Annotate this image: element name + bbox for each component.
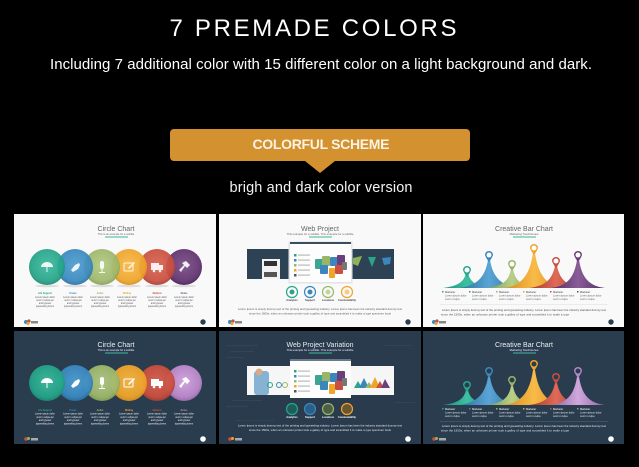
- circle captions: typesetting lorem: [36, 422, 54, 426]
- peak legend: Lorem ipsum dolor: [526, 410, 548, 414]
- panel: light creative bar chart slide: Marketing Touchstones: [510, 232, 539, 236]
- panel: light circle chart slide: Circle Chart: [98, 226, 135, 233]
- peak legend: [442, 407, 602, 418]
- peak legend: Marketer: [580, 290, 590, 294]
- circle captions: and typeset: [121, 302, 134, 305]
- body text: since the 1500s, when an unknown printer took a galley of type and scrambled it to make a type: [441, 312, 570, 316]
- circle captions: Lorem ipsum dolor: [35, 296, 55, 299]
- footer logo and page dot: [24, 436, 206, 442]
- circle captions: and typeset: [151, 419, 164, 422]
- circle captions: [35, 292, 194, 308]
- circle captions: Power: [69, 409, 77, 412]
- circle captions: typesetting lorem: [64, 305, 82, 308]
- peak chart: [443, 253, 605, 288]
- circle captions: Lorem ipsum dolor: [174, 412, 194, 416]
- circle captions: Audio: [97, 292, 104, 295]
- circle captions: Lorem ipsum dolor: [147, 296, 167, 299]
- feature labels: Locations: [322, 415, 335, 419]
- peak legend: sunt in culpa: [445, 414, 460, 418]
- peak legend: sunt in culpa: [472, 414, 487, 418]
- circle captions: typesetting lorem: [120, 422, 138, 426]
- circle captions: and typeset: [94, 419, 107, 422]
- circle captions: Lorem ipsum dolor: [90, 412, 110, 416]
- circle captions: and typeset: [67, 302, 80, 305]
- circle captions: Notes: [181, 409, 188, 412]
- panel: dark circle chart slide: Circle Chart: [98, 342, 135, 349]
- title: 7 PREMADE COLORS: [170, 15, 456, 42]
- panel: light circle chart slide: This is an example for a subtitle: [98, 232, 135, 236]
- banner caption: brigh and dark color version: [230, 180, 412, 196]
- peak legend: Lorem ipsum dolor: [445, 410, 467, 414]
- body text: [238, 424, 402, 432]
- panel: light circle chart slide: [14, 214, 216, 327]
- peak legend: Marketer: [526, 407, 536, 411]
- circle captions: Lorem ipsum dolor: [90, 296, 110, 299]
- feature labels: Commutability: [338, 415, 357, 419]
- footer logo and page dot: [24, 319, 206, 325]
- circle captions: Lorem ipsum dolor: [119, 412, 139, 416]
- circle captions: typesetting lorem: [175, 422, 193, 426]
- peak legend: Marketer: [499, 290, 509, 294]
- panel: light creative bar chart slide: [423, 214, 624, 327]
- circle captions: Lorem ipsum dolor: [147, 412, 167, 416]
- circle chart: six overlapping circles: [29, 249, 202, 287]
- circle captions: typesetting lorem: [91, 422, 109, 426]
- footer logo and page dot: [432, 436, 614, 442]
- body text: Lorem Ipsum is simply dummy text of the printing and typesetting industry. Lorem Ipsum has been the industry standard dummy text: [442, 308, 606, 312]
- icons: umbrella, plug, mic, note, truck, gavel: [41, 377, 190, 389]
- circle captions: sunt in culpa qui: [120, 416, 138, 419]
- circle captions: Lorem ipsum dolor: [117, 296, 137, 299]
- peak legend: Lorem ipsum dolor: [499, 410, 521, 414]
- feature labels: [286, 415, 357, 419]
- circle captions: Lorem ipsum dolor: [63, 412, 83, 416]
- faint code texture: [226, 345, 415, 421]
- peak legend: Marketer: [499, 407, 509, 411]
- body text: [238, 307, 402, 316]
- peak legend: sunt in culpa: [445, 297, 460, 301]
- panel: dark creative bar chart slide: Creative Bar Chart: [495, 342, 553, 349]
- banner: colorful scheme: COLORFUL SCHEME: [252, 136, 390, 152]
- circle captions: [35, 409, 194, 426]
- circle captions: sunt in culpa qui: [175, 416, 193, 419]
- peak legend: sunt in culpa: [499, 297, 514, 301]
- circle captions: sunt in culpa qui: [148, 299, 166, 302]
- feature labels: Analytics: [286, 415, 298, 419]
- circle captions: Lorem ipsum dolor: [63, 296, 83, 299]
- circle captions: and typeset: [39, 419, 52, 422]
- peak legend: Lorem ipsum dolor: [526, 294, 548, 298]
- peak legend: sunt in culpa: [526, 297, 541, 301]
- peak legend: sunt in culpa: [526, 414, 541, 418]
- panel: light creative bar chart slide: Creative Bar Chart: [495, 226, 553, 233]
- circle captions: sunt in culpa qui: [118, 299, 136, 302]
- panel: dark web project variation slide: [219, 331, 421, 444]
- circle captions: and typeset: [178, 419, 191, 422]
- banner: colorful scheme: [170, 129, 470, 173]
- panel: dark creative bar chart slide: Marketing Touchstones: [510, 348, 539, 352]
- circle captions: Audio: [97, 409, 104, 412]
- peak legend: Lorem ipsum dolor: [472, 294, 494, 298]
- peak legend: Lorem ipsum dolor: [580, 294, 602, 298]
- peak legend: Marketer: [472, 290, 482, 294]
- circle captions: Lorem ipsum dolor: [35, 412, 55, 416]
- peak legend: Marketer: [580, 407, 590, 411]
- circle captions: and typeset: [94, 302, 107, 305]
- body text: Lorem Ipsum is simply dummy text of the printing and typesetting industry. Lorem Ipsum has been the industry standard dummy text: [238, 307, 402, 311]
- circle captions: Medical: [153, 292, 162, 295]
- subtitle: Including 7 additional color with 15 different color on a light background and dark.: [50, 56, 592, 73]
- peak legend: Marketer: [553, 407, 563, 411]
- peak legend: Lorem ipsum dolor: [499, 294, 521, 298]
- peak legend: sunt in culpa: [472, 297, 487, 301]
- icons: umbrella, plug, mic, note, truck, gavel: [41, 261, 190, 273]
- circle captions: Lorem ipsum dolor: [174, 296, 194, 299]
- peak legend: Lorem ipsum dolor: [580, 410, 602, 414]
- panel: dark circle chart slide: This is an example for a subtitle: [98, 348, 135, 352]
- circle captions: typesetting lorem: [118, 305, 136, 308]
- body text: Lorem Ipsum is simply dummy text of the printing and typesetting industry. Lorem Ipsum has been the industry standard dummy text: [238, 424, 402, 428]
- screens: product mockups: [247, 242, 394, 284]
- circle captions: and typeset: [151, 302, 164, 305]
- circle captions: typesetting lorem: [175, 305, 193, 308]
- peak chart: [443, 370, 605, 405]
- panel: dark web project variation slide: Web Project Variation: [286, 342, 354, 349]
- peak legend: [442, 290, 602, 301]
- peak legend: Lorem ipsum dolor: [553, 410, 575, 414]
- circle captions: sunt in culpa qui: [91, 416, 109, 419]
- feature labels: [286, 298, 357, 302]
- feature labels: Commutability: [338, 298, 357, 302]
- peak legend: Marketer: [445, 407, 455, 411]
- circle captions: sunt in culpa qui: [64, 299, 82, 302]
- body text: [440, 421, 608, 432]
- circle captions: sunt in culpa qui: [148, 416, 166, 419]
- circle captions: and typeset: [67, 419, 80, 422]
- circle captions: Writing: [125, 409, 134, 412]
- body text: since the 1500s, when an unknown printer took a galley of type and scrambled it to make a type specimen book: [249, 428, 392, 432]
- footer logo and page dot: [228, 319, 411, 325]
- circle captions: sunt in culpa qui: [64, 416, 82, 419]
- circle captions: typesetting lorem: [64, 422, 82, 426]
- body text: since the 1500s, when an unknown printer took a galley of type and scrambled it to make a type: [441, 428, 570, 432]
- peak legend: Marketer: [526, 290, 536, 294]
- feature labels: Locations: [322, 298, 335, 302]
- peak legend: sunt in culpa: [580, 297, 595, 301]
- circle captions: Writing: [123, 292, 132, 295]
- circle captions: and typeset: [123, 419, 136, 422]
- circle captions: sunt in culpa qui: [175, 299, 193, 302]
- circle captions: typesetting lorem: [36, 305, 54, 308]
- peak legend: Marketer: [553, 290, 563, 294]
- peak legend: sunt in culpa: [553, 297, 568, 301]
- footer logo and page dot: [432, 319, 614, 325]
- feature labels: Support: [305, 298, 315, 302]
- circle captions: sunt in culpa qui: [36, 416, 54, 419]
- body text: [440, 304, 608, 316]
- panel: dark circle chart slide: [14, 331, 216, 444]
- panel: dark web project variation slide: This example for a subtitle. This example for a subtitle: [287, 348, 354, 352]
- body text: Lorem Ipsum is simply dummy text of the printing and typesetting industry. Lorem Ipsum has been the industry standard dummy text: [442, 424, 606, 428]
- circle captions: Life Support: [38, 409, 52, 412]
- circle captions: typesetting lorem: [91, 305, 109, 308]
- feature icons: [286, 404, 352, 414]
- feature labels: Support: [305, 415, 315, 419]
- circle captions: Power: [69, 292, 77, 295]
- peak pins: [463, 360, 582, 392]
- footer logo and page dot: [228, 436, 411, 442]
- circle chart: six overlapping circles: [29, 365, 202, 401]
- peak legend: sunt in culpa: [553, 414, 568, 418]
- panel: dark creative bar chart slide: [423, 331, 624, 444]
- peak legend: sunt in culpa: [580, 414, 595, 418]
- circle captions: Life Support: [38, 292, 52, 295]
- peak legend: Marketer: [445, 290, 455, 294]
- feature labels: Analytics: [286, 298, 298, 302]
- panel: light web project slide: [219, 214, 421, 327]
- circle captions: typesetting lorem: [148, 305, 166, 308]
- screens: product mockups: [247, 359, 394, 398]
- circle captions: typesetting lorem: [148, 422, 166, 426]
- peak legend: Lorem ipsum dolor: [472, 410, 494, 414]
- circle captions: sunt in culpa qui: [36, 299, 54, 302]
- peak legend: Marketer: [472, 407, 482, 411]
- peak pins: [463, 244, 582, 277]
- panel: light web project slide: Web Project: [301, 226, 339, 233]
- panel: light web project slide: This example for a subtitle. This example for a subtitle: [287, 232, 354, 236]
- peak legend: sunt in culpa: [499, 414, 514, 418]
- peak legend: Lorem ipsum dolor: [445, 294, 467, 298]
- circle captions: Medical: [153, 409, 162, 412]
- body text: since the 1500s, when an unknown printer took a galley of type and scrambled it to make a type specimen book: [249, 312, 392, 316]
- circle captions: and typeset: [39, 302, 52, 305]
- circle captions: sunt in culpa qui: [91, 299, 109, 302]
- circle captions: and typeset: [178, 302, 191, 305]
- peak legend: Lorem ipsum dolor: [553, 294, 575, 298]
- feature icons: [286, 286, 352, 298]
- circle captions: Notes: [181, 292, 188, 295]
